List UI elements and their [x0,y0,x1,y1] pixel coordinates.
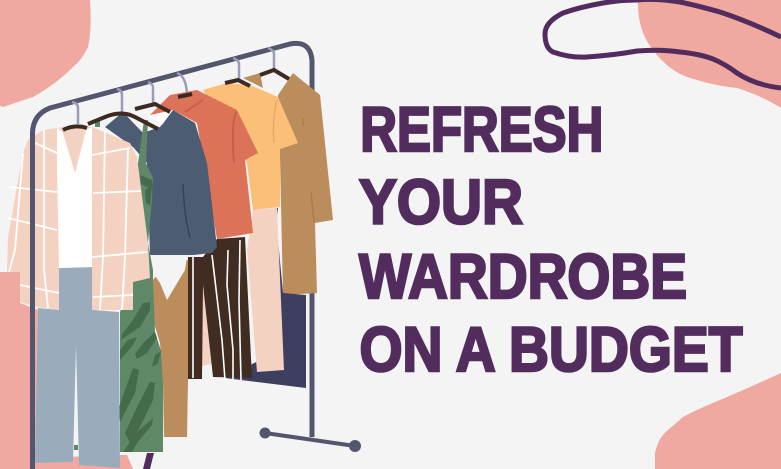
garment: striped trousers [188,237,252,380]
garment: yellow shirt [203,83,298,210]
title [359,95,742,385]
garment: navy blue shirt [105,110,217,255]
title line 2: YOUR [359,168,523,238]
rack frame [32,43,312,469]
garment: white inner top [57,127,92,268]
garment: coral shirt [150,90,258,239]
garment: tan coat [243,73,333,295]
garment: navy trousers [225,208,306,388]
decorative purple line: bottom stub [143,453,154,469]
garment: green dress [95,118,163,452]
title line 3: WARDROBE [359,242,687,312]
blob: top right [638,0,781,108]
garment: plaid jacket [7,127,150,310]
clothing rack [32,43,361,469]
garment: tan dress [153,257,188,437]
title line 1: REFRESH [360,95,603,165]
decorative purple line: top right [545,0,781,88]
garment: blue-grey trousers [35,267,120,468]
garment: peach trousers [200,208,284,372]
hanger bars [63,70,289,130]
blob: top left [0,0,91,107]
rack base [260,428,361,452]
rack left pole front [30,133,35,469]
blob: bottom right [655,373,781,469]
blob: bottom left [0,272,133,469]
hanger hooks [72,48,274,124]
